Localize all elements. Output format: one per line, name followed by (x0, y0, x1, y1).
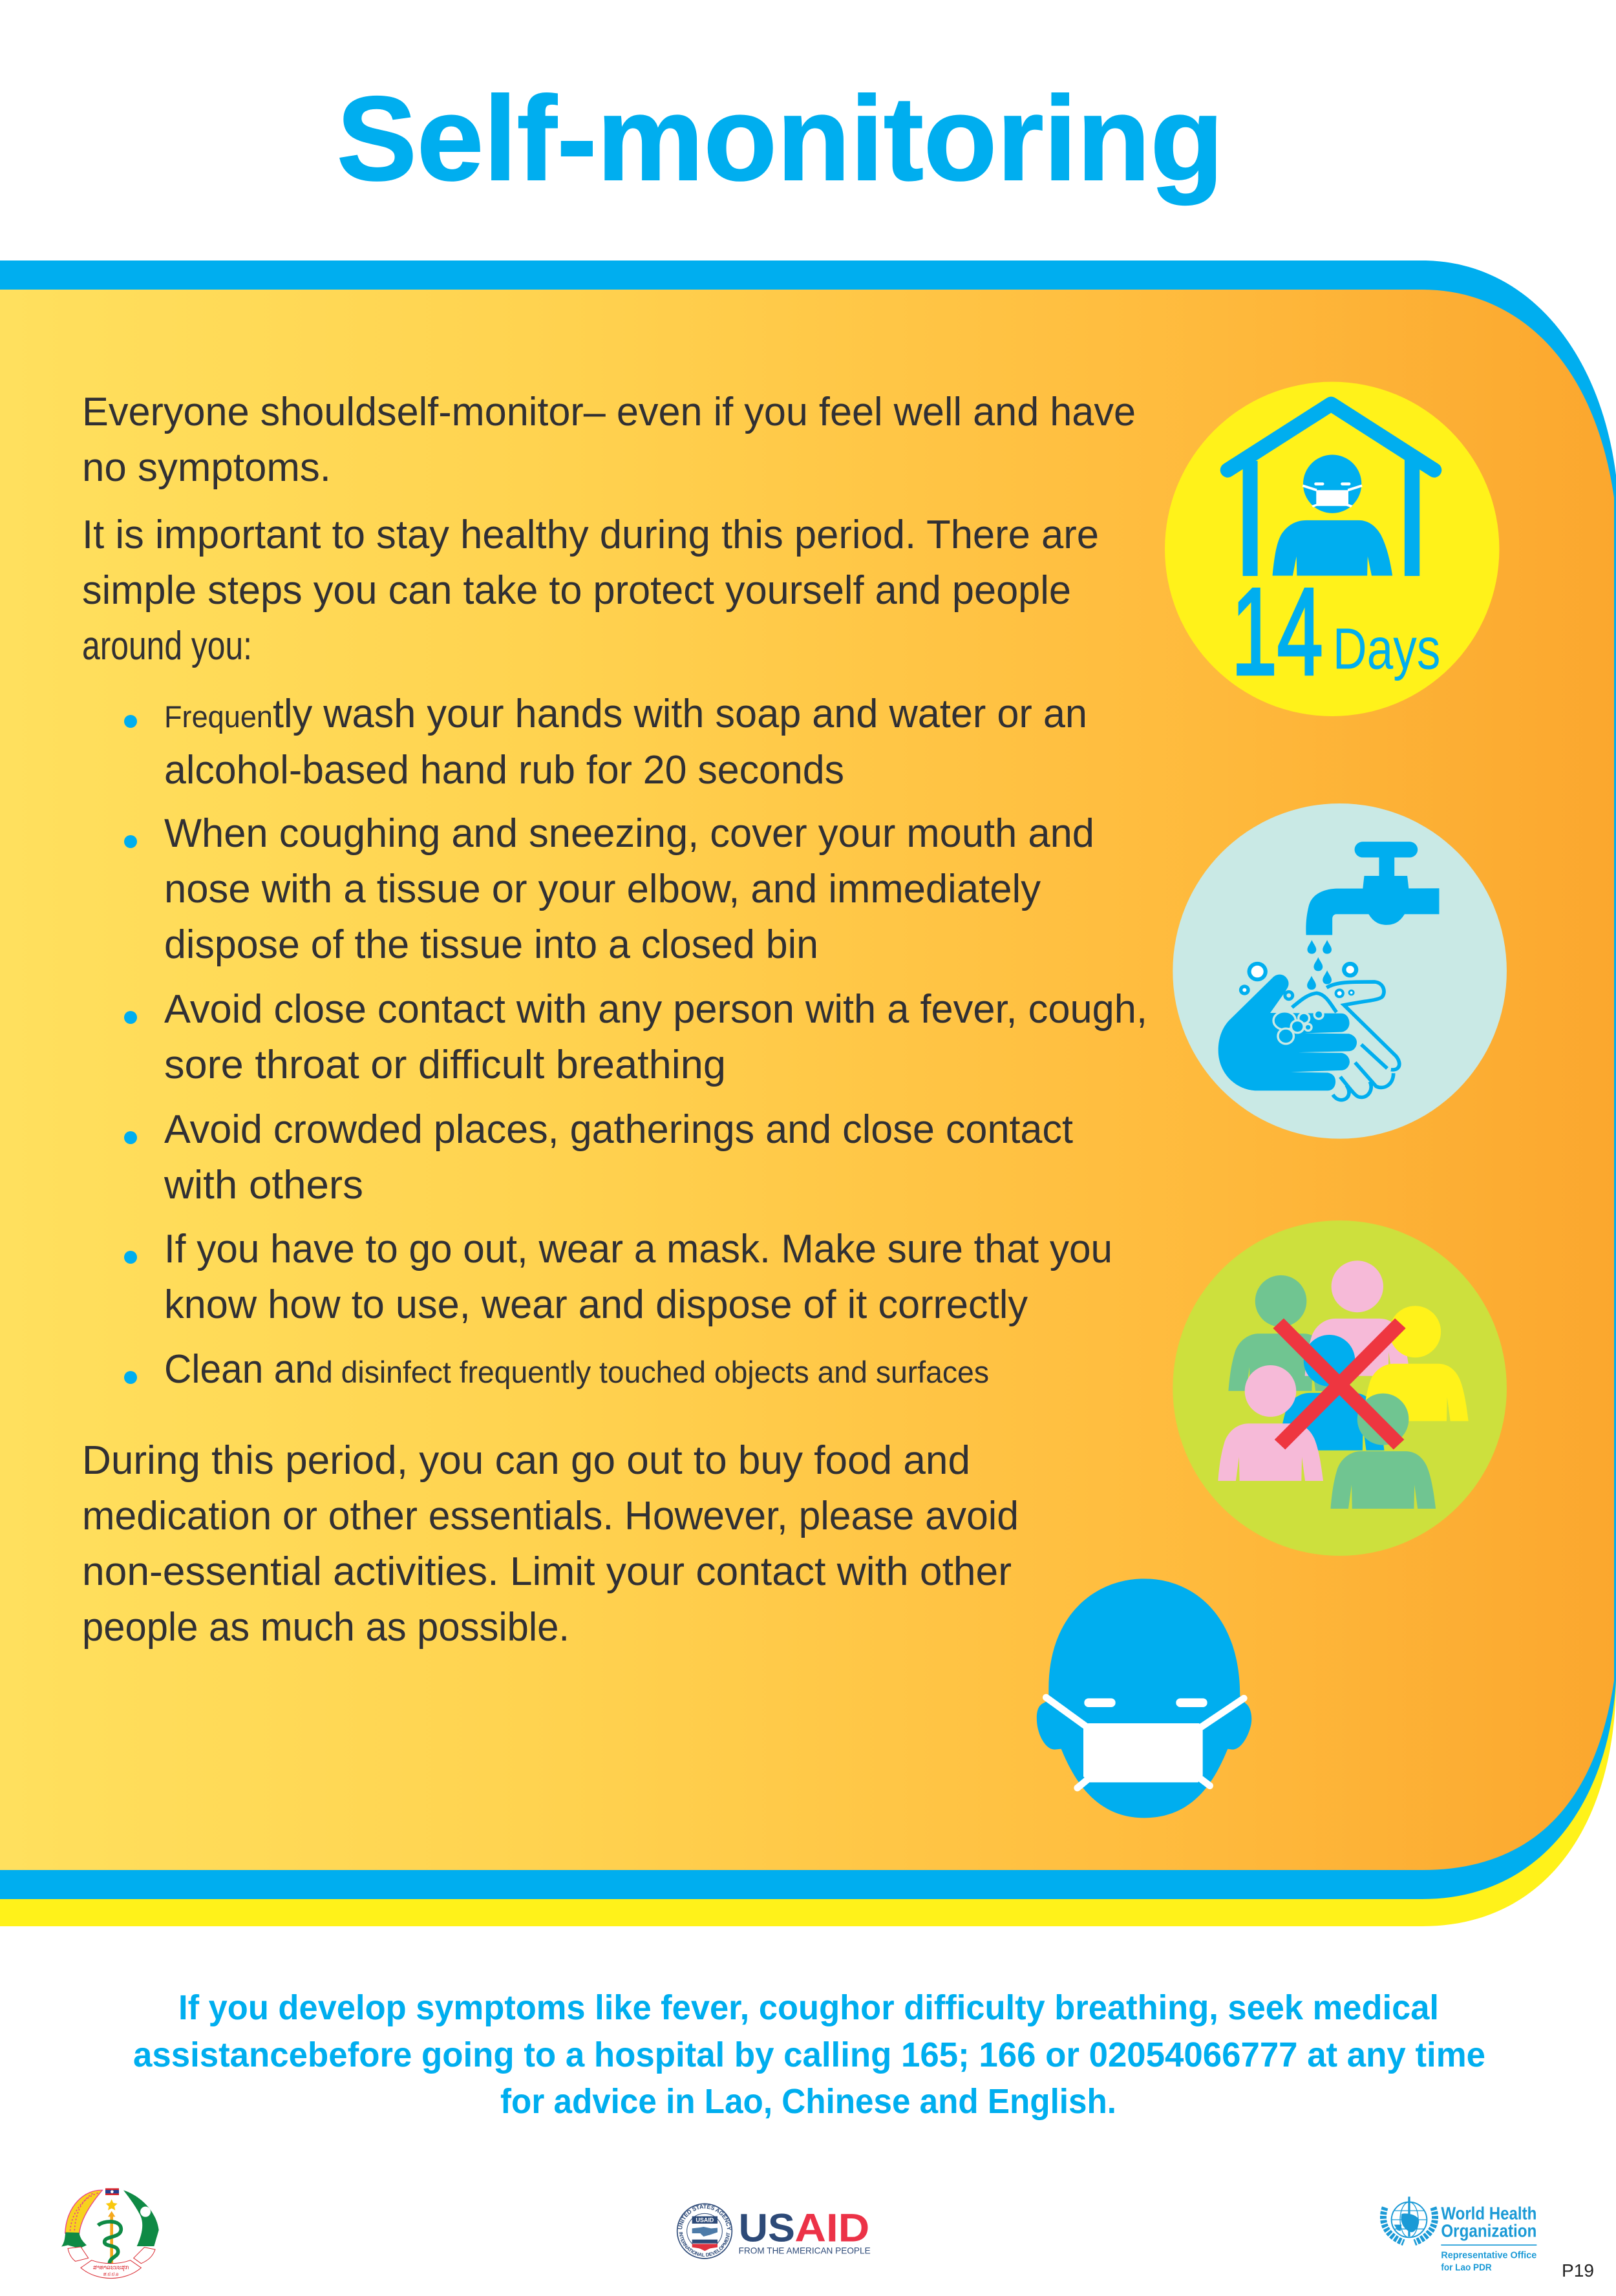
person: pink front (1218, 1365, 1323, 1481)
text block: closing paragraph: medication or other essentials. However, please avoid (82, 1494, 1019, 1538)
bullet: cover coughs and sneezes (124, 811, 1094, 967)
bullet: cover coughs and sneezes: When coughing and sneezing, cover your mouth and (164, 811, 1094, 856)
icon: faucet (1306, 842, 1439, 990)
logo: USAID (676, 2203, 871, 2259)
rice plant (123, 2190, 159, 2246)
callout: seek medical assistance: If you develop symptoms like fever, coughor difficulty breathing, seek medical (178, 1988, 1439, 2027)
text block: introduction: simple steps you can take to protect yourself and people (82, 568, 1071, 613)
logo: USAID: US (739, 2206, 795, 2249)
text block: introduction: around you: (82, 624, 252, 668)
flag (105, 2188, 119, 2195)
page number: P19 (1562, 2260, 1594, 2280)
seal: UNITED STATES AGENCY (677, 2204, 732, 2230)
callout: seek medical assistance (133, 1988, 1485, 2121)
callout: seek medical assistance: for advice in Lao, Chinese and English. (500, 2082, 1116, 2121)
seal (676, 2203, 733, 2259)
logo: USAID: AID (794, 2206, 869, 2249)
bullet: avoid crowds (124, 1107, 1073, 1207)
text block: introduction: It is important to stay healthy during this period. There are (82, 513, 1099, 557)
icon: head wearing mask (1037, 1578, 1251, 1818)
bullet: clean and disinfect: d disinfect frequently touched objects and surfaces (316, 1355, 989, 1389)
logo: Lao Ministry of Health: ສ.ປ.ປ.ລ (103, 2272, 119, 2277)
bullet: wash hands: alcohol-based hand rub for 20 seconds (164, 748, 844, 792)
bullet: cover coughs and sneezes: nose with a tissue or your elbow, and immediately (164, 867, 1041, 911)
ribbon with motto (68, 2247, 155, 2279)
bullet: avoid close contact (124, 987, 1147, 1087)
bullet: wash hands: tly wash your hands with soap and water or an (273, 692, 1087, 736)
text block: closing paragraph: During this period, you can go out to buy food and (82, 1438, 970, 1483)
logo: World Health Organization: World Health (1441, 2203, 1536, 2223)
logo: USAID: FROM THE AMERICAN PEOPLE (739, 2246, 871, 2256)
title: Self-monitoring (337, 72, 1224, 206)
panel: main background bands (0, 260, 1616, 1926)
bullet: avoid close contact: Avoid close contact with any person with a fever, cough, (164, 987, 1147, 1032)
staff and snake (108, 2211, 115, 2264)
seal: USAID (696, 2217, 714, 2224)
icon: red cross (1279, 1323, 1400, 1445)
person: yellow right (1363, 1306, 1469, 1421)
logo: World Health Organization: for Lao PDR (1441, 2262, 1492, 2273)
bullet: clean and disinfect (124, 1347, 989, 1392)
logo: Lao Ministry of Health (61, 2188, 159, 2279)
person: green back left (1228, 1275, 1334, 1391)
corn (65, 2190, 102, 2233)
bullet: wash hands (124, 692, 1087, 792)
text block: introduction (82, 390, 1136, 668)
logo: World Health Organization (1383, 2196, 1536, 2273)
bullet: wear a mask: If you have to go out, wear a mask. Make sure that you (164, 1227, 1112, 1271)
logo: Lao Ministry of Health: ສາທາລະນະສຸກ (93, 2265, 129, 2271)
emblem (1383, 2196, 1435, 2242)
text block: introduction: Everyone shouldself-monitor– even if you feel well and have (82, 390, 1136, 434)
person: green front (1330, 1394, 1436, 1509)
bullet: cover coughs and sneezes: dispose of the tissue into a closed bin (164, 922, 818, 967)
text block: closing paragraph (82, 1438, 1019, 1650)
bullet: avoid crowds: Avoid crowded places, gatherings and close contact (164, 1107, 1073, 1152)
icon: hand washing (1173, 803, 1507, 1139)
bullet: avoid close contact: sore throat or difficult breathing (164, 1043, 726, 1087)
icon: 14 days at home: 14 (1231, 562, 1323, 701)
icon: 14 days at home: Days (1333, 617, 1440, 682)
text block: closing paragraph: people as much as possible. (82, 1605, 569, 1650)
bullet: wear a mask (124, 1227, 1112, 1327)
star (106, 2199, 118, 2210)
person: pink back (1305, 1260, 1410, 1376)
callout: seek medical assistance: assistancebefore going to a hospital by calling 165; 166 or 02054066777 at any time (133, 2036, 1485, 2074)
person: blue centre (1279, 1335, 1385, 1451)
text block: closing paragraph: non-essential activities. Limit your contact with other (82, 1549, 1012, 1594)
icon: avoid crowds (1173, 1220, 1507, 1556)
logo: World Health Organization: Representative Office (1441, 2250, 1536, 2260)
bullet: avoid crowds: with others (164, 1163, 363, 1207)
seal: INTERNATIONAL DEVELOPMENT (679, 2232, 730, 2257)
bullet: wear a mask: know how to use, wear and dispose of it correctly (164, 1282, 1028, 1327)
bullet list: protective steps (124, 692, 1147, 1392)
bullet: wash hands: Frequen (164, 699, 273, 734)
logo: World Health Organization: Organization (1441, 2221, 1536, 2241)
text block: introduction: no symptoms. (82, 445, 331, 490)
icon: washing hands (1218, 962, 1399, 1100)
bullet: clean and disinfect: Clean an (164, 1347, 316, 1392)
icon: 14 days at home (1165, 382, 1499, 716)
